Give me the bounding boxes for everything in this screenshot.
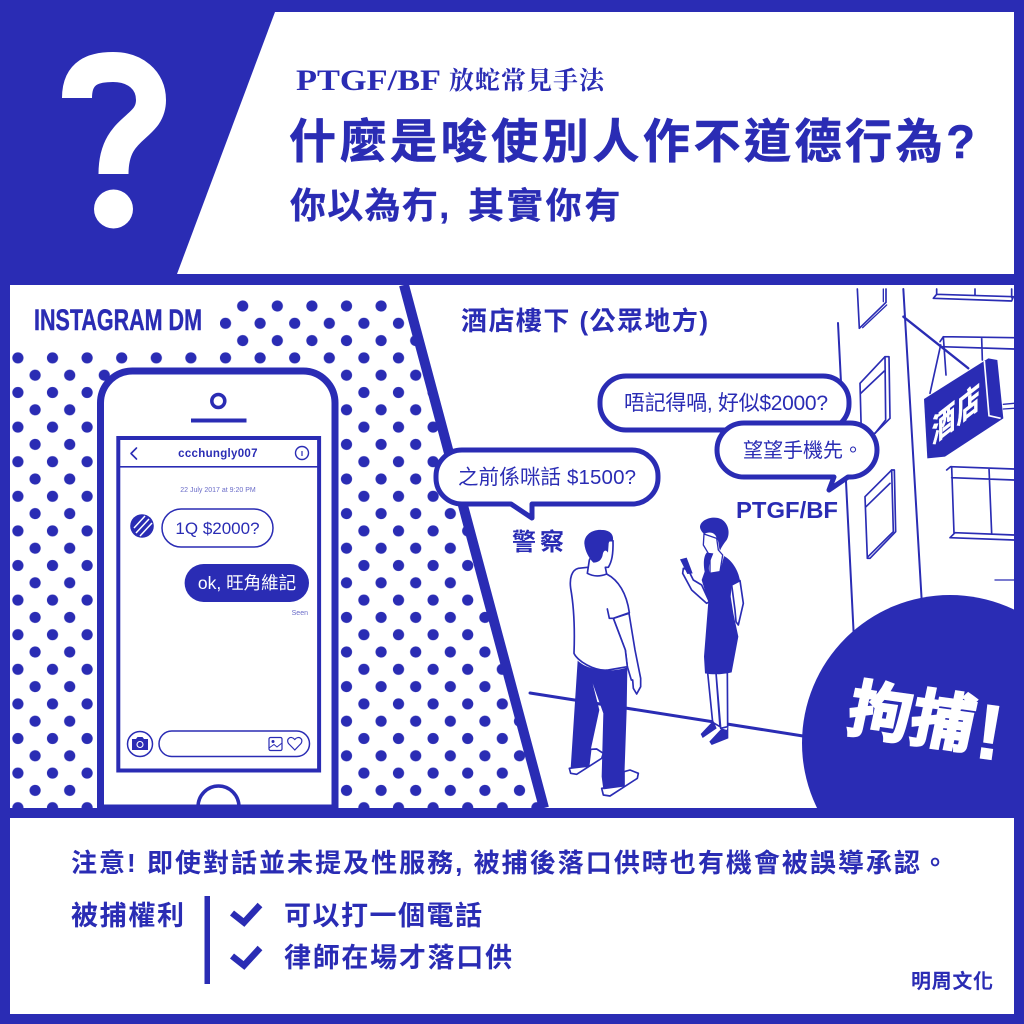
upper right window ledge (933, 289, 1013, 301)
dress (702, 553, 740, 674)
icon: image (269, 738, 282, 750)
arrest text: 拘捕 (842, 675, 981, 761)
right arm (732, 581, 743, 625)
sign support cord (930, 345, 941, 393)
series title (296, 61, 606, 97)
sleeve (607, 609, 613, 618)
divider between scenes (404, 285, 544, 808)
series title: PTGF/BF (296, 64, 441, 97)
face and neck (703, 534, 723, 573)
t-shirt (570, 567, 629, 670)
wall lines (1003, 403, 1014, 409)
building illustration (838, 289, 1014, 660)
icon: heart (288, 738, 302, 750)
panel background (10, 818, 1014, 1014)
username: ccchungly007 (178, 448, 258, 460)
figure: police officer (569, 530, 641, 796)
hotel sign (924, 358, 1003, 458)
neck and face (587, 541, 613, 576)
rights label: 被捕權利 (71, 901, 184, 931)
message date: 22 July 2017 at 9:20 PM (180, 487, 256, 494)
left arm (683, 568, 709, 603)
bottom panel (10, 818, 1014, 1014)
icon: camera button (128, 732, 152, 756)
speech bubble: look at phone (717, 423, 877, 490)
chat bubble: reply: ok, 旺角維記 (198, 573, 296, 593)
phone speaker (191, 418, 246, 422)
avatar (130, 514, 154, 538)
window 3 (865, 470, 896, 558)
chat bubble: question: 1Q $2000? (175, 519, 260, 538)
icon: question mark (77, 67, 151, 228)
phone screen (118, 438, 319, 770)
legs (708, 673, 728, 728)
screen header divider (119, 466, 318, 468)
speech bubble: look at phone: 望望手機先。 (743, 434, 863, 463)
phone illustration (100, 371, 335, 808)
icon: check (232, 948, 260, 966)
building edges (838, 289, 922, 660)
header panel (77, 12, 1014, 274)
hair (700, 518, 729, 551)
hair (584, 530, 613, 563)
icon: back chevron (131, 448, 136, 459)
speech bubble: PTGF forgets: 唔記得喎, 好似$2000? (624, 392, 828, 415)
figure: woman (680, 518, 743, 745)
series title: 放蛇常見手法 (449, 61, 606, 97)
header white area (177, 12, 1014, 274)
label: Instagram DM: INSTAGRAM DM (34, 304, 202, 337)
shoes (569, 749, 638, 796)
lower wall line (995, 578, 1014, 582)
rights divider (204, 896, 210, 984)
right 2: 律師在場才落口供 (284, 943, 512, 973)
pavement line (530, 693, 803, 736)
arrest exclamation: ! (971, 687, 1009, 777)
seen label: Seen (292, 610, 308, 617)
hotel sign: 酒店 (932, 376, 981, 452)
label: police: 警察 (512, 529, 564, 556)
arm (613, 613, 641, 694)
subheading: 你以為冇, (290, 185, 451, 226)
window 1 (857, 289, 887, 328)
frame strips (0, 285, 1024, 818)
arrest badge (802, 595, 1024, 891)
sign supports (903, 317, 968, 368)
message input (159, 731, 310, 756)
chat bubble: reply (185, 564, 309, 602)
speech bubble: PTGF forgets (600, 376, 849, 430)
lower right window (947, 467, 1014, 540)
publisher credit: 明周文化 (911, 969, 993, 993)
upper right window (940, 337, 1014, 375)
window 2 (860, 357, 890, 433)
middle panel (10, 285, 1024, 891)
speech bubble: officer: 之前係咪話 $1500? (458, 466, 636, 489)
phone camera (212, 394, 225, 408)
speech bubble: officer (436, 450, 658, 518)
shoes (701, 721, 728, 745)
phone body (100, 371, 335, 808)
icon: info (296, 446, 308, 460)
subheading: 其實你有 (468, 185, 623, 226)
phone home button (198, 786, 239, 807)
panel background (10, 285, 1014, 808)
trousers (571, 661, 627, 789)
dot pattern background (10, 298, 544, 808)
scene title: 酒店樓下 (公眾地方) (461, 306, 708, 336)
right 1: 可以打一個電話 (284, 901, 482, 931)
label: PTGF/BF: PTGF/BF (736, 497, 838, 523)
warning note: 注意! 即使對話並未提及性服務, 被捕後落口供時也有機會被誤導承認。 (71, 843, 948, 880)
phone in hand (680, 558, 693, 574)
icon: check (232, 905, 260, 922)
main heading: 什麼是唆使別人作不道德行為? (289, 115, 975, 168)
chat bubble: question (162, 509, 273, 547)
